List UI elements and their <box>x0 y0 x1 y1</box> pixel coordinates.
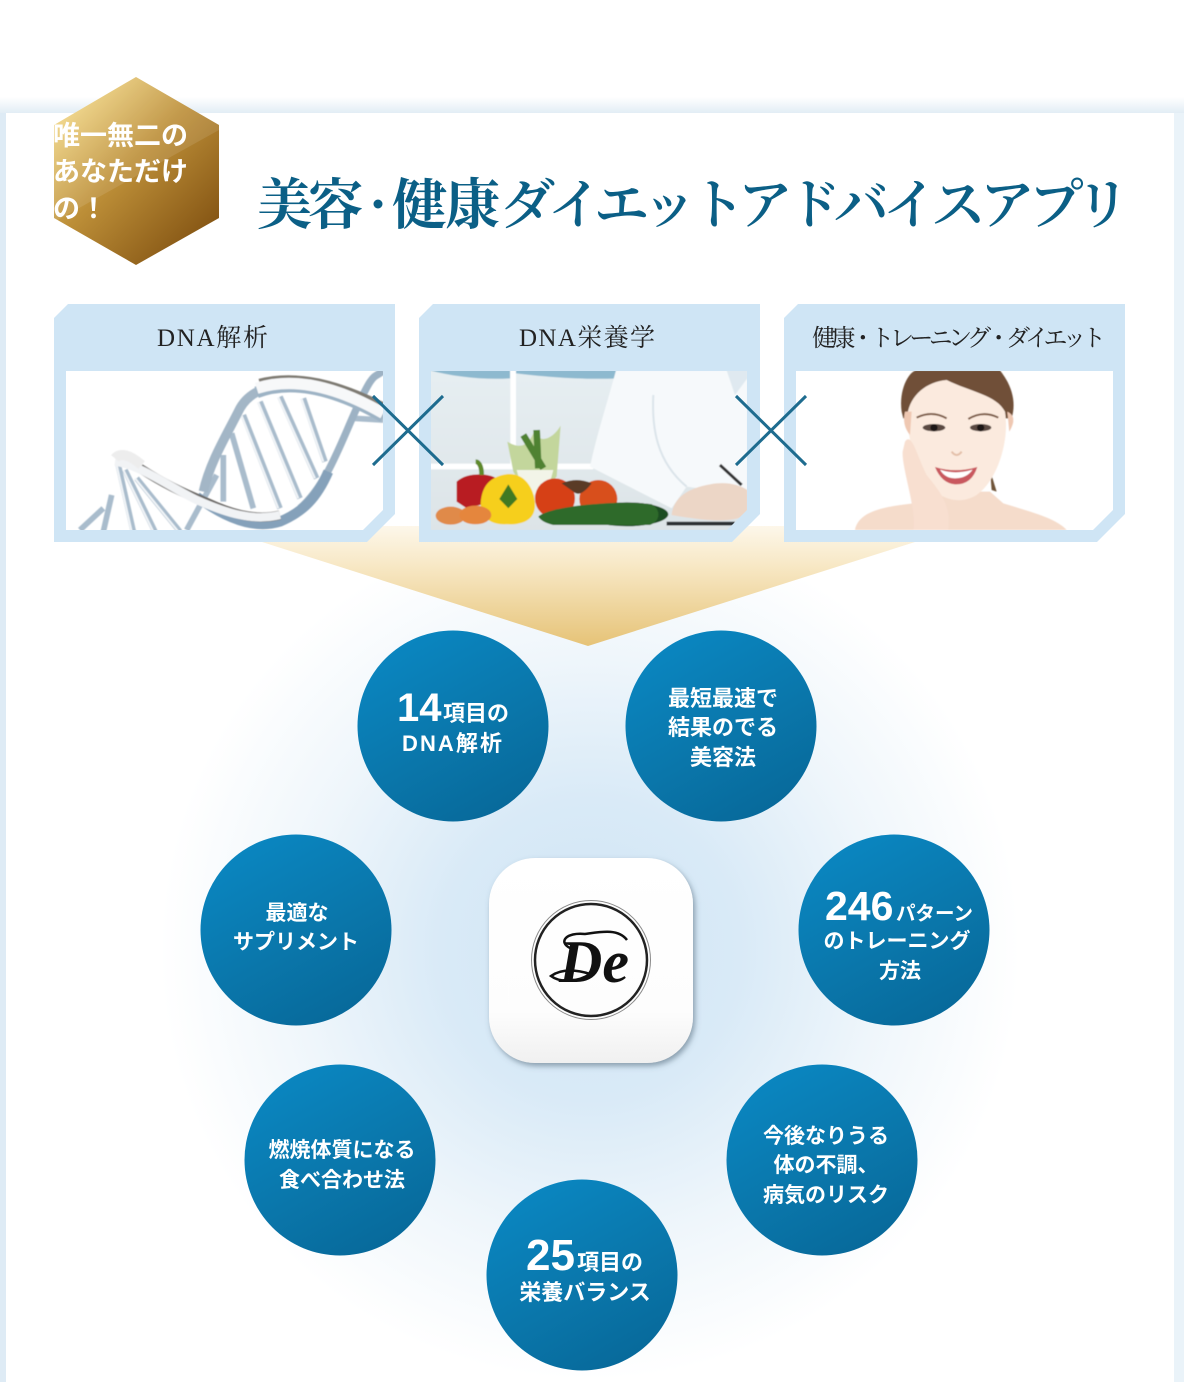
badge: hexagon <box>53 77 219 265</box>
circle: fat burning food combos: 燃焼体質になる <box>268 1139 416 1162</box>
heading: DNA nutrition: DNA栄養学 <box>519 324 655 352</box>
circle: 246 training patterns: 246 <box>825 883 893 929</box>
app icon <box>489 858 693 1063</box>
circle: 14 DNA items: DNA解析 <box>402 731 502 756</box>
circle: 14 DNA items: 14 <box>397 686 442 730</box>
background glow <box>6 540 1174 1382</box>
image: doctor and vegetables <box>430 370 750 530</box>
circle: 246 training patterns: パターン <box>896 903 973 925</box>
image: smiling woman <box>796 370 1113 531</box>
title: 美容 <box>257 175 363 236</box>
circle: illness risk: 病気のリスク <box>763 1184 889 1207</box>
circle: 25 nutrition items <box>486 1180 678 1370</box>
panel: DNA analysis <box>54 304 395 542</box>
circle: fastest beauty method <box>626 630 816 822</box>
title: ダイエットアドバイスアプリ <box>500 175 1130 236</box>
circle: fastest beauty method: 美容法 <box>690 745 756 770</box>
image: DNA helix <box>66 371 383 532</box>
page background shadow band <box>0 97 1184 113</box>
circle: 246 training patterns <box>798 834 990 1026</box>
circle: illness risk: 今後なりうる <box>763 1125 889 1148</box>
logo monogram: De <box>558 929 629 995</box>
badge text: の！ <box>53 194 107 224</box>
circle: supplements: サプリメント <box>233 931 359 954</box>
heading: DNA analysis: DNA解析 <box>157 324 268 352</box>
cross mark 2 <box>736 396 806 465</box>
circle: 14 DNA items: 項目の <box>443 701 509 726</box>
panel: DNA nutrition <box>419 304 760 542</box>
cross mark 1 <box>373 396 443 465</box>
circle: 246 training patterns: 方法 <box>879 960 921 983</box>
circle: fat burning food combos: 食べ合わせ法 <box>279 1169 405 1192</box>
circle: 246 training patterns: のトレーニング <box>824 929 970 953</box>
circle: supplements: 最適な <box>266 902 328 925</box>
title: 健康 <box>392 175 500 236</box>
circle: 25 nutrition items: 栄養バランス <box>519 1280 651 1305</box>
circle: fat burning food combos <box>244 1064 436 1256</box>
circle: illness risk <box>726 1064 918 1256</box>
circle: 25 nutrition items: 25 <box>526 1231 575 1280</box>
heading: health training diet: 健康・トレーニング・ダイエット <box>812 325 1106 352</box>
circle: supplements <box>200 834 392 1026</box>
circle: fastest beauty method: 最短最速で <box>668 686 778 711</box>
circle: fastest beauty method: 結果のでる <box>668 715 778 740</box>
circle: 14 DNA items <box>358 630 548 822</box>
circle: illness risk: 体の不調、 <box>774 1154 878 1177</box>
panel: health training diet <box>784 304 1125 542</box>
circle: 25 nutrition items: 項目の <box>577 1250 643 1275</box>
badge text: 唯一無二の <box>53 121 188 151</box>
gold funnel arrow <box>262 526 915 646</box>
logo ring <box>532 900 650 1020</box>
badge text: あなただけ <box>53 157 188 187</box>
